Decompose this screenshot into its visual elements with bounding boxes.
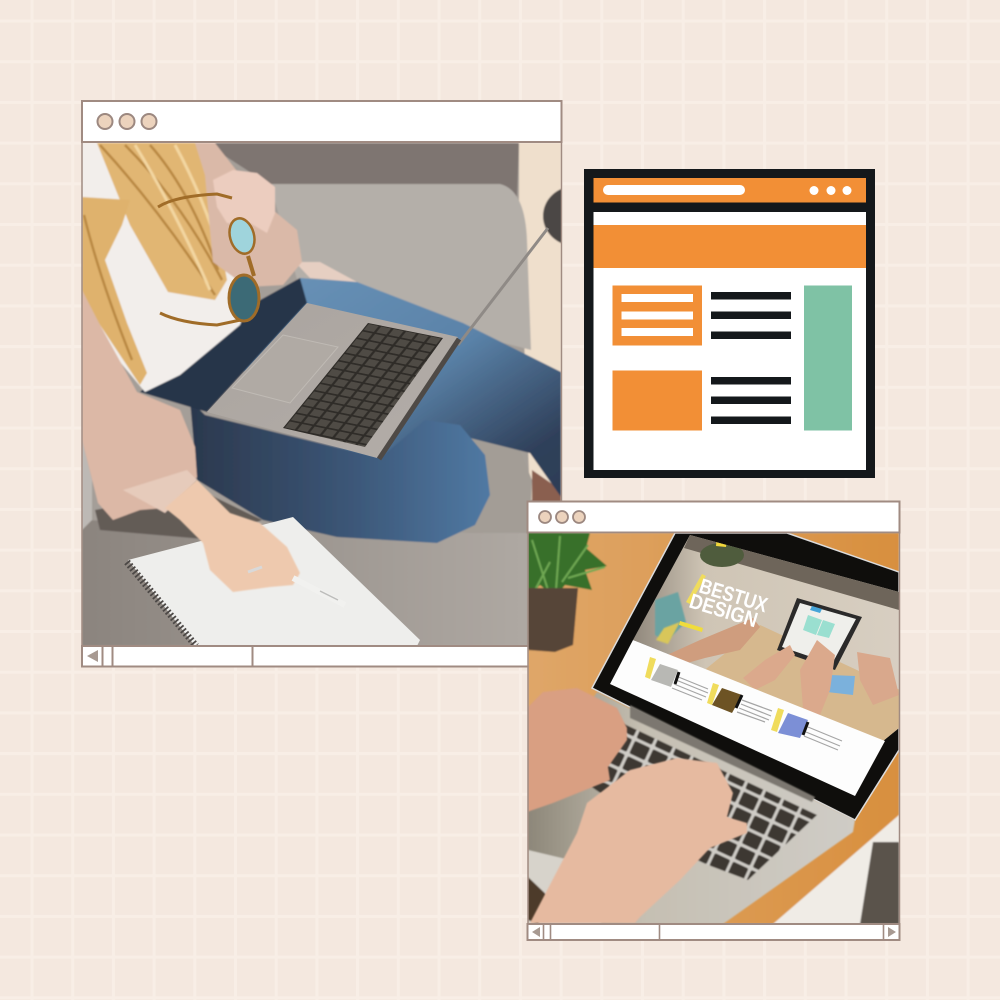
title bar bbox=[528, 502, 900, 532]
typing hands bbox=[527, 688, 747, 923]
icon: website wireframe bbox=[584, 169, 875, 478]
title bar bbox=[82, 101, 562, 142]
screen headline: BESTUX bbox=[697, 575, 770, 617]
panel: browser window with laptop web design photo bbox=[527, 502, 905, 940]
screen thumbnails bbox=[645, 657, 842, 750]
panel: browser window with woman on sofa photo bbox=[82, 101, 607, 666]
scrollbar bbox=[528, 924, 900, 940]
photo: hands typing on laptop bbox=[527, 530, 905, 924]
laptop screen bbox=[592, 530, 905, 820]
laptop bbox=[207, 228, 548, 459]
photo: woman with laptop on sofa bbox=[82, 143, 607, 646]
laptop screen: DESIGN bbox=[687, 590, 760, 632]
glasses bbox=[158, 194, 259, 325]
notebook and pen bbox=[127, 480, 420, 646]
scrollbar bbox=[82, 646, 562, 666]
laptop base and keyboard bbox=[528, 692, 855, 924]
